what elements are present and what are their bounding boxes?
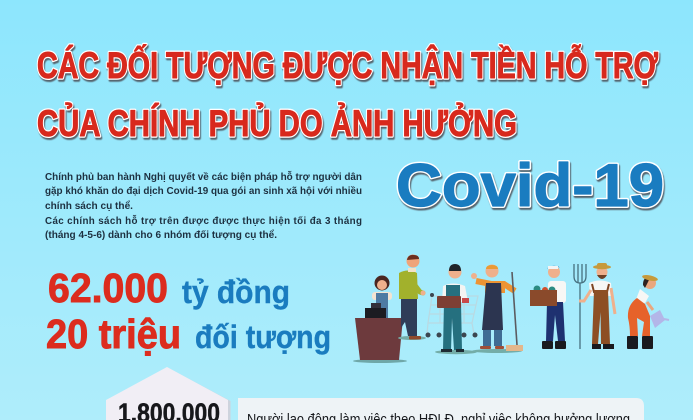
intro text block: (tháng 4-5-6) dành cho 6 nhóm đối tượng cụ thể.	[45, 230, 277, 241]
intro text block: chính sách cụ thể.	[45, 201, 133, 212]
heading: Covid-19: Covid-19	[396, 152, 664, 219]
worker: man with clipboard	[435, 264, 477, 354]
stat: 20 triệu đối tượng: đối tượng	[195, 319, 331, 355]
worker: gardener with watering can	[627, 274, 669, 349]
group marker: 1.800.000	[106, 367, 230, 420]
group description panel	[238, 398, 644, 420]
stat: 20 triệu đối tượng	[46, 311, 331, 357]
worker: cleaner with broom	[471, 264, 523, 353]
intro text block	[45, 172, 362, 241]
stat: 62.000 tỷ đồng: tỷ đồng	[182, 274, 290, 310]
worker: man with vegetable crate	[530, 266, 566, 349]
illustration: workers	[353, 254, 669, 363]
worker: cashier at counter	[353, 276, 407, 363]
intro text block: Chính phủ ban hành Nghị quyết về các biện pháp hỗ trợ người dân	[45, 172, 362, 183]
stat: 62.000 tỷ đồng: 62.000	[48, 265, 168, 311]
worker: man with green shirt and cart	[398, 254, 478, 340]
intro text block: gặp khó khăn do đại dịch Covid-19 qua gói an sinh xã hội với nhiều	[45, 186, 362, 197]
title	[37, 44, 658, 144]
title line 2: CỦA CHÍNH PHỦ DO ẢNH HƯỞNG	[37, 102, 517, 144]
stat: 62.000 tỷ đồng	[48, 265, 290, 311]
intro text block: Các chính sách hỗ trợ trên được được thực hiện tối đa 3 tháng	[45, 216, 362, 227]
stat: 20 triệu đối tượng: 20 triệu	[46, 311, 181, 357]
title line 2: CỦA CHÍNH PHỦ DO ẢNH HƯỞNG	[37, 102, 517, 144]
worker: farmer with pitchfork	[574, 263, 615, 349]
heading: Covid-19: Covid-19	[396, 152, 664, 219]
